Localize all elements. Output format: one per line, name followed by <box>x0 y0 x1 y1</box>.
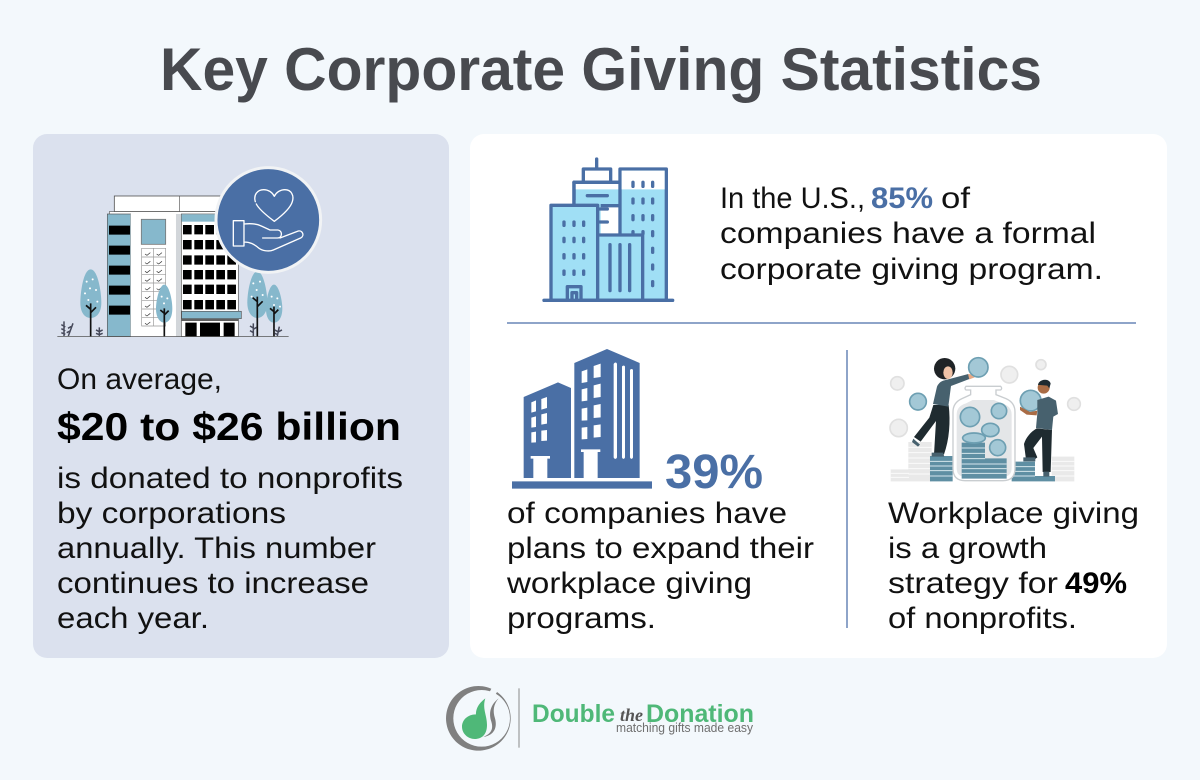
text: growth strategy <box>888 497 1139 635</box>
stat: 39 percent: 39% <box>665 446 763 499</box>
text: donation description: is donated to nonprofits <box>57 462 403 495</box>
logo: Double the Donation: Donation <box>646 700 754 728</box>
text: on average: On average, <box>57 363 222 396</box>
text: expansion plans: of companies have <box>507 497 787 530</box>
illustration: office building with giving hand <box>57 168 321 337</box>
stat: 20 to 26 billion: $20 to $26 billion <box>57 406 401 449</box>
text: growth strategy: of nonprofits. <box>888 602 1077 635</box>
panel: total donations <box>33 134 449 658</box>
text: growth strategy: is a growth <box>888 532 1047 565</box>
logo: Double the Donation <box>446 685 754 751</box>
sub-element: coin on right <box>1020 390 1041 411</box>
text: expansion plans: plans to expand their <box>507 532 814 565</box>
illustration: people filling a coin jar <box>890 358 1080 481</box>
logo: Double the Donation: the <box>620 705 643 725</box>
text: growth strategy: Workplace giving <box>888 497 1139 530</box>
text: 85 percent: In the U.S., <box>720 182 865 215</box>
text: donation description <box>57 462 403 635</box>
icon: city buildings <box>544 159 673 300</box>
logo: Double the Donation: matching gifts made easy <box>616 720 753 735</box>
text: donation description: each year. <box>57 602 209 635</box>
text: 85 percent: 85% <box>871 182 933 215</box>
sub-element: person reaching to jar <box>912 358 975 457</box>
text: expansion plans: workplace giving <box>506 567 752 600</box>
sub-element: person holding coin <box>1020 380 1058 477</box>
sub-element: coin jar <box>953 386 1015 481</box>
text: growth strategy: 49% <box>1065 567 1127 600</box>
text: donation description: annually. This number <box>57 532 376 565</box>
text: 85 percent: corporate giving program. <box>720 253 1103 286</box>
logo: Double the Donation: Double <box>532 700 615 728</box>
icon: solid office buildings <box>512 349 652 489</box>
title: Key Corporate Giving Statistics <box>160 36 1042 103</box>
text: donation description: continues to increase <box>57 567 369 600</box>
text: expansion plans: programs. <box>507 602 656 635</box>
text: donation description: by corporations <box>57 497 286 530</box>
text: 85 percent <box>720 182 1103 286</box>
sub-element: floating coins <box>910 358 988 410</box>
text: expansion plans <box>506 497 814 635</box>
text: growth strategy: strategy for <box>888 567 1058 600</box>
panel: statistics <box>470 134 1167 658</box>
text: 85 percent: companies have a formal <box>720 217 1096 250</box>
text: 85 percent: of <box>941 182 971 215</box>
